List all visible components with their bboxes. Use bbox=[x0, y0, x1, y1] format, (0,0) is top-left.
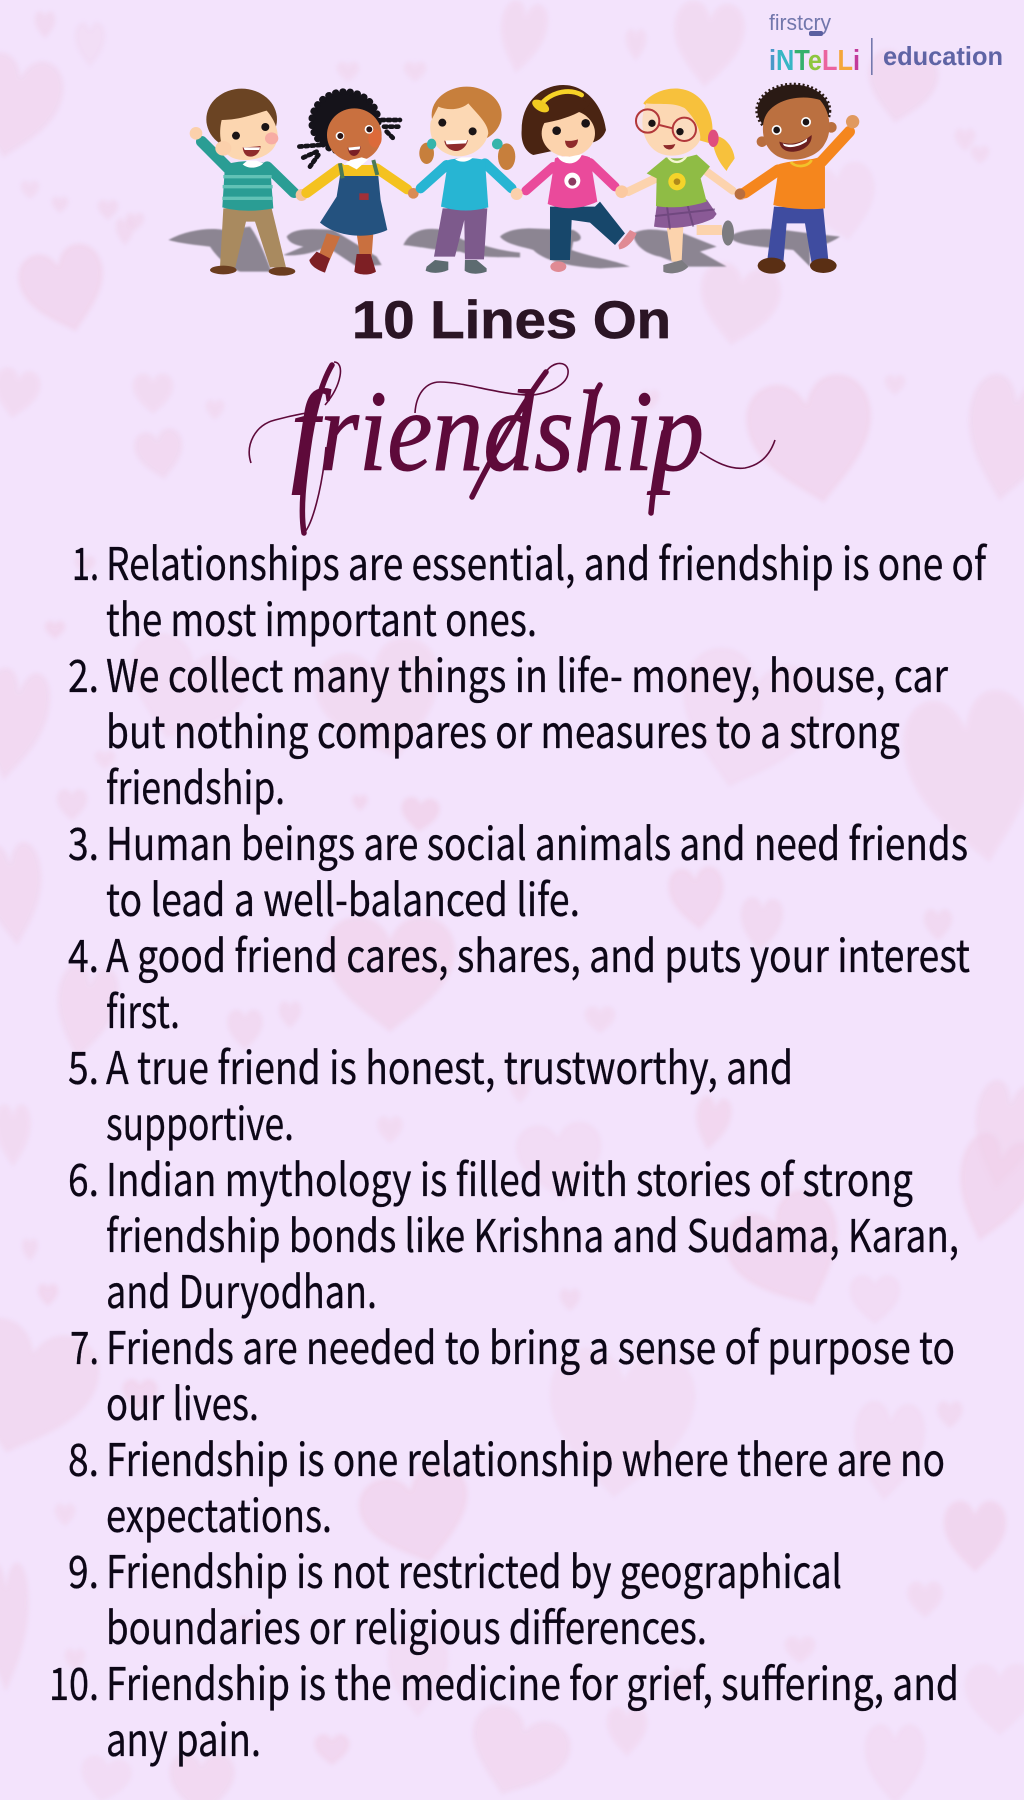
line 4 bbox=[68, 920, 970, 1041]
logo: firstcry intelli education: firstcry bbox=[769, 10, 831, 35]
line 8 bbox=[68, 1424, 945, 1545]
logo: firstcry intelli education: iNTeLLi bbox=[769, 45, 860, 77]
line 5 bbox=[68, 1032, 793, 1153]
child 3: girl in blue sweater bbox=[419, 87, 515, 274]
line 2: friendship. bbox=[106, 752, 285, 817]
logo: firstcry intelli education: education bbox=[883, 41, 1003, 71]
line 3: to lead a well-balanced life. bbox=[106, 864, 580, 929]
line 1: 1. bbox=[72, 528, 99, 593]
line 6: 6. bbox=[68, 1144, 99, 1209]
line 8: 8. bbox=[68, 1424, 99, 1489]
script title: friendship bbox=[249, 362, 775, 533]
line 10: any pain. bbox=[106, 1704, 261, 1769]
line 3 bbox=[68, 808, 968, 929]
line 9 bbox=[68, 1536, 842, 1657]
child 1: boy in teal sweater bbox=[190, 89, 308, 276]
line 2 bbox=[68, 640, 948, 817]
line 1 bbox=[72, 528, 988, 649]
line 10 bbox=[49, 1648, 959, 1769]
child 5: blonde girl with glasses bbox=[615, 89, 747, 273]
line 4: 4. bbox=[68, 920, 99, 985]
line 3: 3. bbox=[68, 808, 99, 873]
line 5: supportive. bbox=[106, 1088, 294, 1153]
line 9: boundaries or religious differences. bbox=[106, 1592, 707, 1657]
script title: friendship: friendship bbox=[291, 367, 704, 495]
line 9: Friendship is not restricted by geographical bbox=[106, 1536, 842, 1601]
numbered list: ten lines on friendship bbox=[49, 528, 988, 1769]
line 10: 10. bbox=[49, 1648, 99, 1713]
ground shadows bbox=[168, 227, 840, 272]
logo: firstcry intelli education bbox=[769, 10, 1003, 77]
illustration: six children holding hands bbox=[168, 85, 859, 276]
line 4: first. bbox=[106, 976, 180, 1041]
line 2: 2. bbox=[68, 640, 99, 705]
line 7: our lives. bbox=[106, 1368, 259, 1433]
line 7 bbox=[70, 1312, 955, 1433]
line 7: 7. bbox=[70, 1312, 99, 1377]
child 2: girl in denim pinafore bbox=[298, 92, 419, 275]
heading: 10 Lines On: 10 Lines On bbox=[352, 291, 671, 350]
line 6: and Duryodhan. bbox=[106, 1256, 377, 1321]
line 5: 5. bbox=[68, 1032, 99, 1097]
line 1: the most important ones. bbox=[106, 584, 537, 649]
line 8: expectations. bbox=[106, 1480, 332, 1545]
line 5: A true friend is honest, trustworthy, and bbox=[106, 1032, 793, 1097]
child 6: boy in orange sweater bbox=[735, 85, 859, 274]
line 9: 9. bbox=[68, 1536, 99, 1601]
child 4: girl in pink sweater bbox=[511, 85, 637, 272]
line 6 bbox=[68, 1144, 959, 1321]
